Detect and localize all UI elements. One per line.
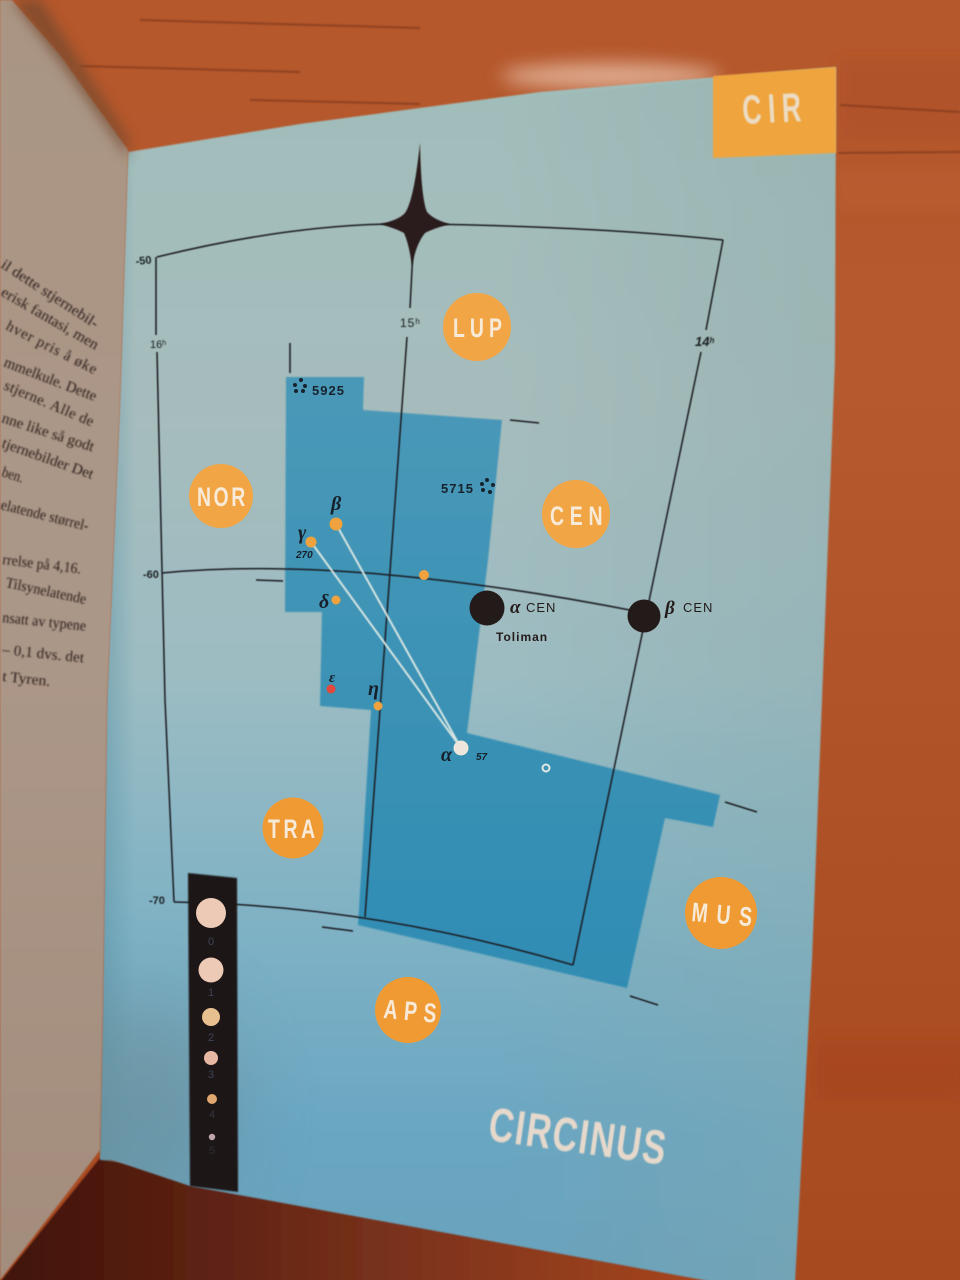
grid labels: 15 [400, 316, 415, 330]
panel: constellation area CIRCINUS [285, 377, 720, 988]
badge: MUS [685, 877, 762, 949]
body text on left page: stjerne. Alle de [1, 378, 96, 430]
cluster 5715: 5715 [441, 481, 474, 496]
body text on left page: rrelse på 4,16. [2, 552, 82, 578]
legend: magnitude scale strip: 0 [208, 936, 214, 948]
body text on left page: ben. [0, 465, 26, 487]
legend: magnitude scale strip: 3 [208, 1069, 214, 1081]
dark table shadow under the book [0, 1158, 714, 1280]
alpha Centauri: α [510, 597, 521, 618]
star labels: γ [298, 522, 307, 544]
star labels: β [330, 493, 342, 515]
stars of Circinus [306, 518, 550, 772]
star labels: ε [329, 670, 336, 686]
grid labels: -50 [135, 254, 152, 268]
star labels: α [441, 744, 453, 766]
legend: magnitude scale strip: 1 [208, 987, 214, 999]
badge: CEN [542, 480, 610, 548]
body text on left page: hver pris å øke [3, 318, 100, 378]
title: CIRCINUS: CIRCINUS [486, 1097, 671, 1175]
star labels: 270 [295, 550, 313, 561]
cluster 5925: 5925 [312, 383, 345, 398]
neighbouring constellation badges [189, 293, 762, 1043]
badge: NOR: NOR [197, 482, 248, 512]
badge: APS [375, 977, 444, 1043]
grid labels: 14 [695, 334, 709, 349]
body text on left page: mmelkule. Dette [2, 355, 99, 405]
page: left text page [0, 0, 128, 1280]
star labels: η [368, 678, 379, 700]
page: star chart sheet [50, 67, 836, 1280]
star labels [295, 493, 488, 766]
body text on left page: il dette stjernebil- [0, 257, 101, 332]
legend: magnitude scale strip: 4 [209, 1109, 215, 1121]
body text on left page: t Tyren. [2, 669, 51, 690]
icon: north compass star [380, 143, 450, 266]
beta Centauri [628, 598, 713, 632]
boundary ticks [256, 343, 757, 1005]
badge: LUP: LUP [453, 313, 507, 343]
star clusters NGC labels [293, 378, 495, 496]
body text on left page: nne like så godt [0, 411, 97, 456]
cluster 5925 [293, 378, 345, 398]
grid labels: h [162, 340, 166, 347]
body text on left page: nsatt av typene [2, 610, 87, 635]
grid labels: h [709, 336, 714, 345]
grid labels: 16 [150, 339, 162, 351]
beta Centauri: CEN [683, 600, 713, 615]
body text on left page: Tilsynelatende [4, 575, 88, 608]
badge: TRA [262, 798, 324, 858]
star labels: δ [319, 591, 329, 613]
tab: CIR abbreviation: CIR [741, 85, 809, 133]
body text on left page: – 0,1 dvs. det [1, 642, 86, 667]
coordinate grid [156, 224, 757, 1005]
constellation lines [311, 524, 461, 748]
badge: APS: APS [382, 994, 444, 1029]
grid labels: -70 [149, 895, 165, 907]
badge: LUP [443, 293, 511, 361]
body text on left page [0, 257, 102, 690]
grid labels: -60 [143, 569, 159, 581]
body text on left page: elatende størrel- [0, 497, 90, 535]
alpha Centauri [470, 590, 556, 644]
cluster 5715 [441, 478, 495, 496]
legend: magnitude scale strip: 2 [208, 1032, 214, 1044]
badge: CEN: CEN [550, 501, 608, 531]
glare on table [500, 63, 720, 89]
legend: magnitude scale strip: 5 [209, 1145, 215, 1157]
badge: TRA: TRA [268, 814, 319, 844]
grid labels [135, 254, 714, 907]
badge: MUS: MUS [690, 897, 762, 933]
badge: NOR [189, 464, 253, 528]
grid labels: h [415, 317, 421, 326]
bright stars of Centaurus [470, 590, 713, 644]
tab: CIR abbreviation [713, 67, 836, 158]
alpha Centauri: Toliman [496, 630, 548, 644]
body text on left page: erisk fantasi, men [0, 285, 102, 354]
alpha Centauri: CEN [526, 600, 556, 615]
body text on left page: tjernebilder Det [0, 436, 96, 483]
beta Centauri: β [664, 598, 675, 619]
legend: magnitude scale strip [188, 873, 238, 1192]
star labels: 57 [476, 752, 488, 763]
